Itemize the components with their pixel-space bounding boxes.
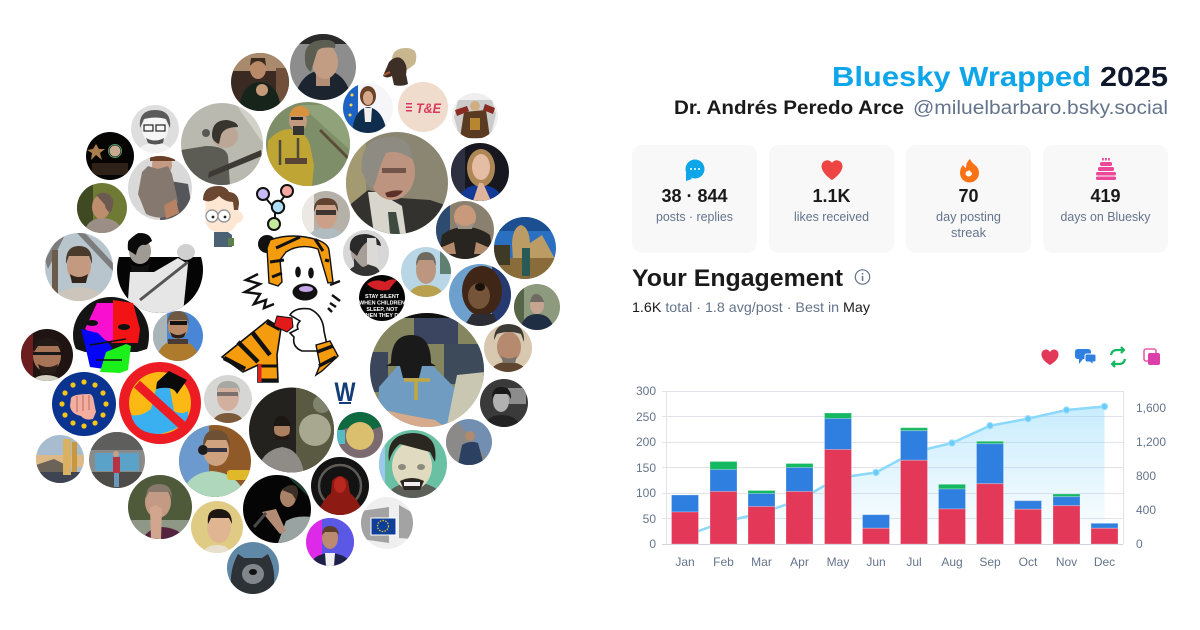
stat label: days on Bluesky <box>1060 210 1151 224</box>
Hobbes nose and mouth <box>292 284 318 300</box>
bars: Oct <box>1014 501 1042 544</box>
avatar: man with glasses and beard <box>21 329 73 381</box>
legend: likes heart <box>1041 350 1059 365</box>
avatar: man with glasses, portrait <box>302 191 350 239</box>
stat card: day posting streak <box>906 145 1031 253</box>
month labels: Jan <box>675 555 695 569</box>
avatar: smiling hiker <box>153 311 203 361</box>
avatar: smiling man on gold <box>191 501 243 553</box>
month labels: Feb <box>713 555 734 569</box>
avatar: castle under blue sky <box>494 217 556 280</box>
left axis labels: 50 <box>643 512 656 526</box>
stat card: days on Bluesky <box>1043 145 1168 253</box>
left axis labels: 300 <box>636 384 656 398</box>
stat value: 1.1K <box>812 186 851 206</box>
month labels: Jul <box>906 555 922 569</box>
avatar: no pollution sign <box>119 362 201 444</box>
avatar: bald man in black shirt <box>436 201 494 259</box>
user name and handle <box>674 98 1168 119</box>
stat label: day posting <box>936 210 1001 224</box>
avatar: man with grey hair and glasses <box>204 375 252 423</box>
avatar: young man at lake <box>401 247 452 297</box>
avatar: woman with EU flag <box>343 83 393 133</box>
bars: Jul <box>900 428 928 544</box>
avatar: cartoon man with glasses <box>203 186 243 247</box>
engagement summary text: 1.6K total · 1.8 avg/post · Best in May <box>632 299 870 315</box>
avatar: pencil sketch man <box>131 105 179 153</box>
Hobbes eyes <box>295 266 314 278</box>
left axis labels <box>636 384 656 551</box>
month labels: Nov <box>1056 555 1077 569</box>
avatar: woman playing guitar <box>181 103 263 186</box>
avatar: stay silent poster: STAY SILENT <box>365 294 400 300</box>
avatar: stay silent poster <box>359 275 405 321</box>
stat value: 419 <box>1090 186 1121 206</box>
month labels: May <box>827 555 849 569</box>
left axis labels: 0 <box>649 537 656 551</box>
bars: Aug <box>938 484 966 544</box>
avatar: firefighter <box>266 102 350 186</box>
right axis labels <box>1136 401 1166 551</box>
stat card: posts and replies <box>632 145 757 253</box>
avatar: red hooded figure <box>311 457 369 515</box>
bars: Apr <box>786 464 813 544</box>
avatar: T&E logo <box>398 82 448 132</box>
avatar: coloured mask <box>73 297 149 373</box>
chart legend icons <box>1041 347 1160 367</box>
avatar: woman with dog <box>449 264 512 326</box>
right axis labels: 1,200 <box>1136 435 1166 449</box>
right axis labels: 0 <box>1136 537 1143 551</box>
stat label: likes received <box>794 210 869 224</box>
avatar: green cartoon creature <box>337 412 383 458</box>
title: Bluesky Wrapped <box>832 61 1091 92</box>
legend: replies <box>1075 349 1096 365</box>
avatar: black and white guitarist <box>117 226 203 313</box>
month labels: Jun <box>866 555 886 569</box>
avatar: man clapping <box>231 53 289 111</box>
icon: flame <box>960 159 979 182</box>
Hobbes arm <box>290 309 327 351</box>
left axis labels: 100 <box>636 486 656 500</box>
avatar: man on TV <box>306 518 354 566</box>
avatar: older man in profile <box>77 183 127 233</box>
avatar: stay silent poster: WHEN THEY DIE <box>361 313 404 319</box>
stat value: 70 <box>958 186 979 206</box>
chart grid <box>662 391 1124 544</box>
stat label <box>936 210 1001 240</box>
bars: Nov <box>1053 494 1080 544</box>
right axis labels: 800 <box>1136 469 1156 483</box>
avatar: dark water scene <box>86 132 134 180</box>
bars: Sep <box>976 441 1004 544</box>
stat value: 38 · 844 <box>661 186 728 206</box>
avatar: T&E logo: T&E <box>416 100 442 116</box>
avatar: man in headset with microphone <box>179 425 251 497</box>
cumulative points <box>873 403 1108 476</box>
avatar: man in forest <box>514 284 560 330</box>
icon: birthday cake <box>1096 158 1116 180</box>
avatar: black and white young man <box>480 379 528 427</box>
left axis labels: 250 <box>636 410 656 424</box>
month labels: Sep <box>979 555 1001 569</box>
avatar: man holding cat <box>128 154 194 220</box>
avatar: bearded young man <box>45 233 113 301</box>
left axis labels: 150 <box>636 461 656 475</box>
avatar: grey wolf <box>227 542 279 594</box>
month labels: Dec <box>1094 555 1115 569</box>
Hobbes head <box>266 235 340 314</box>
month labels <box>675 555 1115 569</box>
cumulative area <box>685 406 1104 544</box>
legend: quotes <box>1144 349 1160 365</box>
heading: Your Engagement: Your Engagement <box>632 265 843 292</box>
avatar: hooded dinosaur <box>383 48 416 86</box>
bars: May <box>824 413 852 544</box>
left axis labels: 200 <box>636 435 656 449</box>
stat label: posts · replies <box>656 210 733 224</box>
stat label: streak <box>951 226 987 240</box>
avatar: hiker in mountains <box>446 419 492 465</box>
avatar: man at night by flowers <box>249 387 336 473</box>
bars: Jun <box>862 515 890 544</box>
icon: info <box>855 270 870 284</box>
bars: Dec <box>1091 523 1118 544</box>
Hobbes whiskers <box>245 274 340 312</box>
avatar: European Commission <box>361 497 413 549</box>
month labels: Oct <box>1019 555 1038 569</box>
legend: reposts <box>1111 347 1125 367</box>
month labels: Mar <box>751 555 772 569</box>
Hobbes red scarf <box>274 316 293 332</box>
avatar: man with hands on face <box>128 475 192 540</box>
avatar: Darth Vader in blue shirt <box>370 313 485 427</box>
Hobbes leg <box>316 341 338 375</box>
icon: chat bubble <box>686 160 704 181</box>
bars: Mar <box>748 490 775 544</box>
right axis labels: 400 <box>1136 503 1156 517</box>
avatar: EU fist <box>52 372 116 436</box>
avatar: stay silent poster: WHEN CHILDREN <box>359 300 405 306</box>
avatar: man speaking into microphone <box>243 475 312 543</box>
bars: Feb <box>710 462 737 544</box>
month labels: Aug <box>941 555 963 569</box>
icon: heart <box>822 160 842 180</box>
avatar bubble cluster <box>21 34 560 594</box>
title <box>832 61 1168 92</box>
stat card: likes received <box>769 145 894 253</box>
avatar: blonde woman <box>451 143 509 201</box>
avatar: large older man in suit <box>346 132 448 234</box>
Hobbes ear and orange forehead <box>258 235 333 286</box>
avatar: stay silent poster: SLEEP, NOT <box>366 307 398 313</box>
avatar: man in profile <box>290 34 356 100</box>
avatar: W logo: W <box>334 377 356 407</box>
illustration: Hobbes the tiger <box>222 235 340 382</box>
avatar: anime bearded man <box>379 430 447 498</box>
avatar: chimney landscape <box>36 435 84 483</box>
user name and handle: Dr. Andrés Peredo Arce <box>674 98 904 119</box>
bars: Jan <box>672 495 698 544</box>
icon: molecule network <box>257 185 293 230</box>
avatar: man in hat with goatee <box>484 324 532 372</box>
Hobbes body with stripes <box>222 320 281 382</box>
right axis labels: 1,600 <box>1136 401 1166 415</box>
user name and handle: @miluelbarbaro.bsky.social <box>913 98 1168 119</box>
avatar: painted warrior <box>452 93 498 139</box>
title: 2025 <box>1100 61 1168 92</box>
month labels: Apr <box>790 555 809 569</box>
avatar: person with blue tank <box>89 432 145 488</box>
engagement chart <box>636 384 1166 569</box>
cumulative line <box>685 406 1104 536</box>
avatar: man covering half his face <box>343 230 389 276</box>
